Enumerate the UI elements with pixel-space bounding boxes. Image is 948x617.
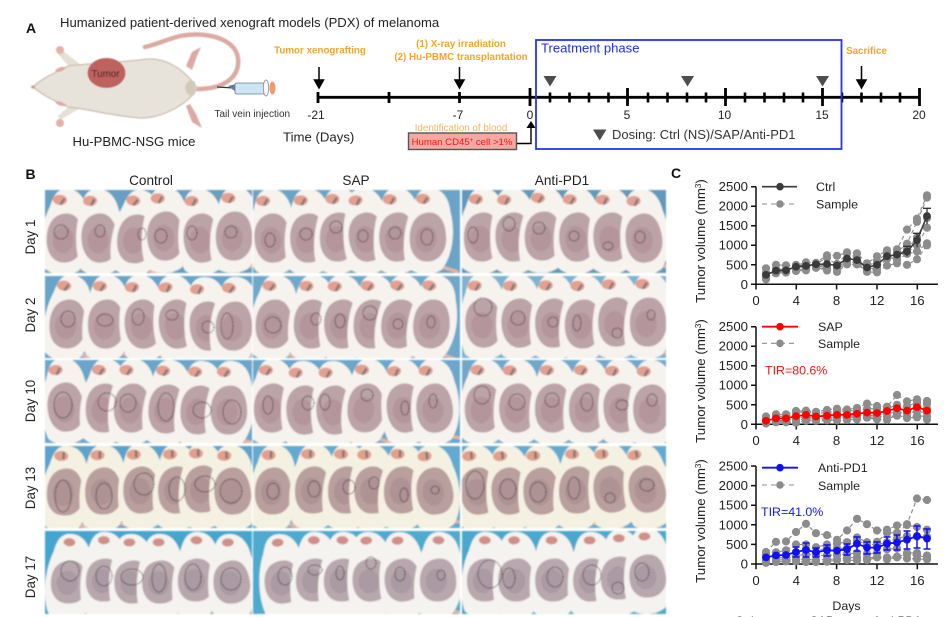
y axis title: Tumor volume (mm: [693, 468, 708, 583]
legend: Anti-PD1: [818, 461, 868, 475]
row label: day 13: Day 13: [23, 467, 38, 509]
x tick labels: 8: [833, 433, 840, 448]
major ticks: [318, 88, 920, 106]
photo: SAP day 1: [252, 189, 461, 274]
chart: control tumor volume: [693, 179, 938, 308]
x tick labels: 8: [833, 573, 840, 588]
x tick labels: 16: [910, 573, 925, 588]
x axis title: Days: [832, 599, 861, 613]
column heading: anti-PD1: Anti-PD1: [535, 173, 589, 188]
y tick labels: 1000: [719, 238, 748, 253]
y tick labels: 2500: [719, 319, 748, 334]
arrow: sacrifice: [857, 66, 866, 88]
photo: control day 10: [44, 359, 253, 444]
y tick labels: 2500: [719, 458, 748, 474]
callout: CD45 threshold: cell >1%: [473, 137, 513, 148]
y axis title: Tumor volume (mm: [693, 188, 708, 303]
illustration: mouse with tumor: [31, 34, 238, 128]
title: Humanized patient-derived xenograft models (PDX) of melanoma: [60, 15, 440, 30]
TIR annotation: TIR=80.6%: [765, 364, 827, 378]
legend: Sample: [818, 479, 860, 493]
axis title: time: Time (Days): [283, 130, 354, 144]
dosing legend: Dosing: Ctrl (NS)/SAP/Anti-PD1: [612, 127, 796, 142]
chart: SAP tumor volume: [693, 319, 938, 448]
annotation: blood identification: Identification of blood: [415, 123, 507, 134]
photo: anti-PD1 day 1: [461, 189, 667, 274]
tick labels: 20: [912, 108, 926, 122]
x tick labels: 16: [910, 293, 925, 308]
y axis title: 3: [694, 323, 703, 328]
annotation: irradiation and transplantation: [394, 39, 528, 63]
callout: CD45 threshold: +: [470, 138, 474, 144]
TIR annotation: TIR=41.0%: [761, 505, 823, 519]
y axis title: ): [693, 459, 708, 464]
x tick labels: 12: [870, 573, 884, 588]
sample series: [766, 498, 927, 563]
mean series: [766, 407, 927, 421]
photo: anti-PD1 day 13: [461, 445, 667, 529]
y tick labels: 1000: [719, 517, 748, 532]
label: mice strain: Hu-PBMC-NSG mice: [72, 134, 195, 149]
x tick labels: 4: [793, 433, 800, 448]
legend: Ctrl: [816, 180, 835, 194]
tick labels: 15: [815, 108, 829, 122]
column heading: control: Control: [129, 173, 173, 188]
timeline: [307, 88, 926, 122]
x tick labels: 16: [910, 433, 925, 448]
y tick labels: [719, 319, 748, 432]
x tick labels: 12: [870, 433, 884, 448]
arrow: blood check to day 0: [517, 121, 536, 144]
sample series: [766, 395, 927, 424]
y tick labels: 1000: [719, 378, 748, 393]
tumor: [88, 58, 126, 88]
y axis title: ): [693, 319, 708, 324]
photo grid: [39, 185, 686, 617]
y tick labels: 1500: [719, 218, 748, 233]
label: tail vein injection: Tail vein injection: [214, 109, 290, 120]
x tick labels: 12: [870, 293, 884, 308]
y tick labels: 0: [741, 277, 748, 292]
callout: CD45 threshold: [408, 133, 516, 150]
y tick labels: 1500: [719, 498, 748, 513]
icon: syringe: [217, 80, 276, 96]
legend: [762, 461, 868, 493]
tumor: Tumor: [92, 69, 120, 80]
x tick labels: [752, 433, 925, 448]
panel label B: B: [26, 166, 36, 182]
x tick labels: 4: [793, 573, 800, 588]
y tick labels: 2000: [719, 199, 748, 214]
tick labels: 10: [718, 108, 731, 122]
annotation: irradiation and transplantation: (1) X-ray irradiation: [416, 39, 506, 50]
row label: day 17: Day 17: [23, 556, 38, 598]
tick labels: 5: [624, 108, 631, 122]
column heading: SAP: SAP: [342, 173, 370, 188]
x tick labels: [752, 293, 925, 308]
panel: treatment phase: [536, 40, 842, 149]
row label: day 1: Day 1: [23, 220, 38, 254]
dosing markers: [544, 76, 829, 86]
legend: SAP: [818, 320, 843, 334]
y tick labels: 2500: [719, 179, 748, 194]
mean series: [766, 208, 931, 275]
row label: day 10: Day 10: [23, 380, 38, 422]
y tick labels: 2000: [719, 478, 748, 493]
y axis title: ): [693, 179, 708, 184]
legend: Sample: [818, 337, 860, 351]
y tick labels: 500: [726, 397, 748, 412]
photo: control day 17: [44, 530, 253, 615]
chart: anti-PD1 tumor volume: [693, 458, 938, 613]
y tick labels: 0: [741, 417, 748, 432]
axes: [751, 187, 938, 290]
legend: [762, 180, 858, 212]
photo: anti-PD1 day 2: [461, 275, 667, 359]
photo: control day 2: [44, 275, 253, 359]
y tick labels: [719, 458, 748, 572]
legend: Sample: [816, 198, 858, 212]
callout: CD45 threshold: Human CD45: [412, 137, 470, 148]
photo: control day 13: [44, 445, 253, 529]
tick labels: 0: [527, 108, 534, 122]
mean series: [766, 526, 930, 557]
axes: [751, 466, 938, 569]
x tick labels: 4: [793, 293, 800, 308]
photo: SAP day 2: [252, 275, 461, 359]
y tick labels: 2000: [719, 339, 748, 354]
panel label A: A: [26, 20, 36, 36]
row label: day 2: Day 2: [23, 298, 38, 332]
axes: [751, 327, 938, 430]
arrow: day -21: [314, 67, 324, 88]
annotation: tumor xenografting: Tumor xenografting: [274, 46, 366, 56]
annotation: sacrifice: Sacrifice: [846, 46, 887, 57]
y tick labels: 500: [726, 537, 748, 552]
x tick labels: 0: [752, 293, 760, 308]
x tick labels: 0: [752, 573, 760, 588]
photo: anti-PD1 day 10: [461, 359, 667, 444]
y axis title: 3: [694, 463, 703, 468]
y tick labels: 500: [726, 257, 748, 272]
photo: control day 1: [44, 189, 253, 274]
y axis title: Tumor volume (mm: [693, 328, 708, 443]
sample series: [766, 195, 927, 279]
x tick labels: 0: [752, 433, 760, 448]
photo: SAP day 17: [252, 530, 461, 615]
panel label C: C: [671, 165, 681, 181]
arrow: day -7: [455, 67, 464, 88]
annotation: irradiation and transplantation: (2) Hu-PBMC transplantation: [394, 52, 528, 63]
x tick labels: [752, 573, 925, 588]
y tick labels: 0: [741, 556, 748, 572]
y tick labels: 1500: [719, 358, 748, 373]
minor ticks: [550, 92, 900, 102]
legend: [762, 320, 860, 351]
tick labels: [307, 108, 926, 122]
tick labels: -7: [453, 108, 464, 122]
panel: treatment phase: Treatment phase: [541, 40, 640, 56]
y tick labels: [719, 179, 748, 292]
photo: SAP day 13: [252, 445, 461, 529]
clipped legend at bottom edge: [735, 614, 921, 617]
photo: SAP day 10: [252, 359, 461, 444]
photo: anti-PD1 day 17: [461, 530, 667, 615]
tick labels: -21: [307, 108, 325, 122]
x tick labels: 8: [833, 293, 840, 308]
y axis title: 3: [694, 183, 703, 188]
